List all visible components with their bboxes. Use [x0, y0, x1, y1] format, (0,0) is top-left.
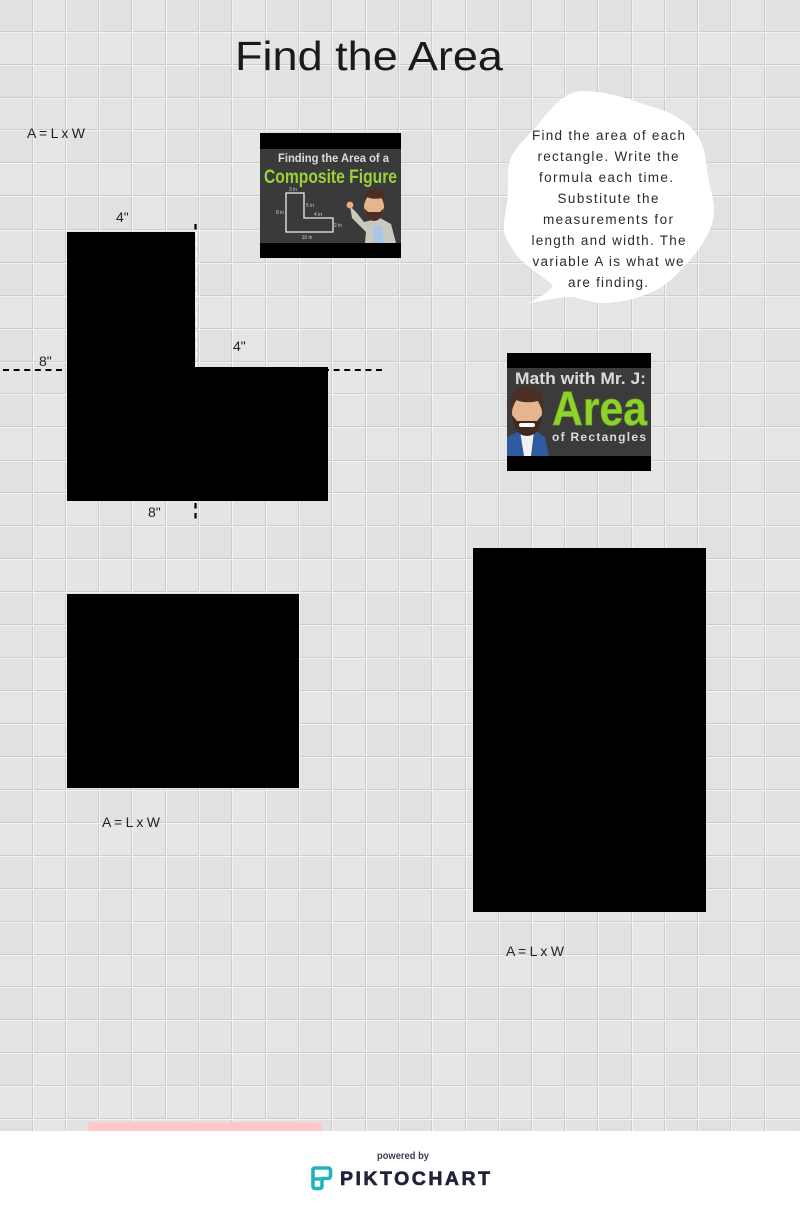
dimension label: right 4 in: 4"	[233, 338, 246, 354]
footer	[0, 1131, 800, 1211]
piktochart logo icon	[313, 1168, 330, 1188]
pink bar	[88, 1122, 322, 1131]
speech bubble	[504, 91, 714, 303]
bubble text: are finding.	[568, 275, 648, 290]
dimension label: top 4 in: 4"	[116, 209, 129, 225]
bubble text: measurements for	[543, 212, 674, 227]
L-shape diagram: 5 in	[306, 203, 314, 209]
formula: lower right: A = L x W	[506, 943, 565, 959]
dimension lines	[0, 224, 382, 520]
L-shape diagram: 3 in	[289, 187, 297, 193]
thumbnail heading: Math with Mr. J:	[515, 369, 646, 388]
video thumbnail: area of rectangles	[507, 353, 651, 471]
title: Find the Area	[235, 33, 503, 79]
L-shape diagram: 4 in	[314, 212, 322, 218]
L-shaped composite figure	[67, 232, 328, 501]
thumbnail heading: Finding the Area of a	[278, 151, 389, 165]
bubble text	[532, 128, 686, 290]
bubble text: Find the area of each	[532, 128, 685, 143]
thumbnail subheading: Composite Figure	[264, 167, 397, 188]
powered by: powered by	[377, 1151, 429, 1162]
L-shape diagram: 10 in	[302, 235, 313, 241]
character: smiling teacher	[507, 386, 549, 456]
bubble text: variable A is what we	[532, 254, 684, 269]
formula: lower left: A = L x W	[102, 814, 161, 830]
character: pointing teacher	[347, 188, 396, 243]
bubble text: formula each time.	[539, 170, 673, 185]
piktochart wordmark: PIKTOCHART	[340, 1168, 490, 1190]
formula: top left: A = L x W	[27, 125, 86, 141]
dimension label: left 8 in: 8"	[39, 353, 52, 369]
rectangle: lower left	[67, 594, 299, 788]
bubble text: length and width. The	[532, 233, 686, 248]
dimension label: bottom 8 in: 8"	[148, 504, 161, 520]
L-shape diagram: 2 in	[334, 223, 342, 229]
thumbnail subheading: of Rectangles	[552, 430, 646, 444]
L-shape diagram: 8 in	[276, 210, 284, 216]
bubble text: rectangle. Write the	[538, 149, 678, 164]
rectangle: lower right	[473, 548, 706, 912]
video thumbnail: composite figure	[260, 133, 401, 258]
thumbnail big word: Area	[552, 383, 647, 436]
bubble text: Substitute the	[558, 191, 658, 206]
L-shape diagram	[276, 187, 342, 241]
